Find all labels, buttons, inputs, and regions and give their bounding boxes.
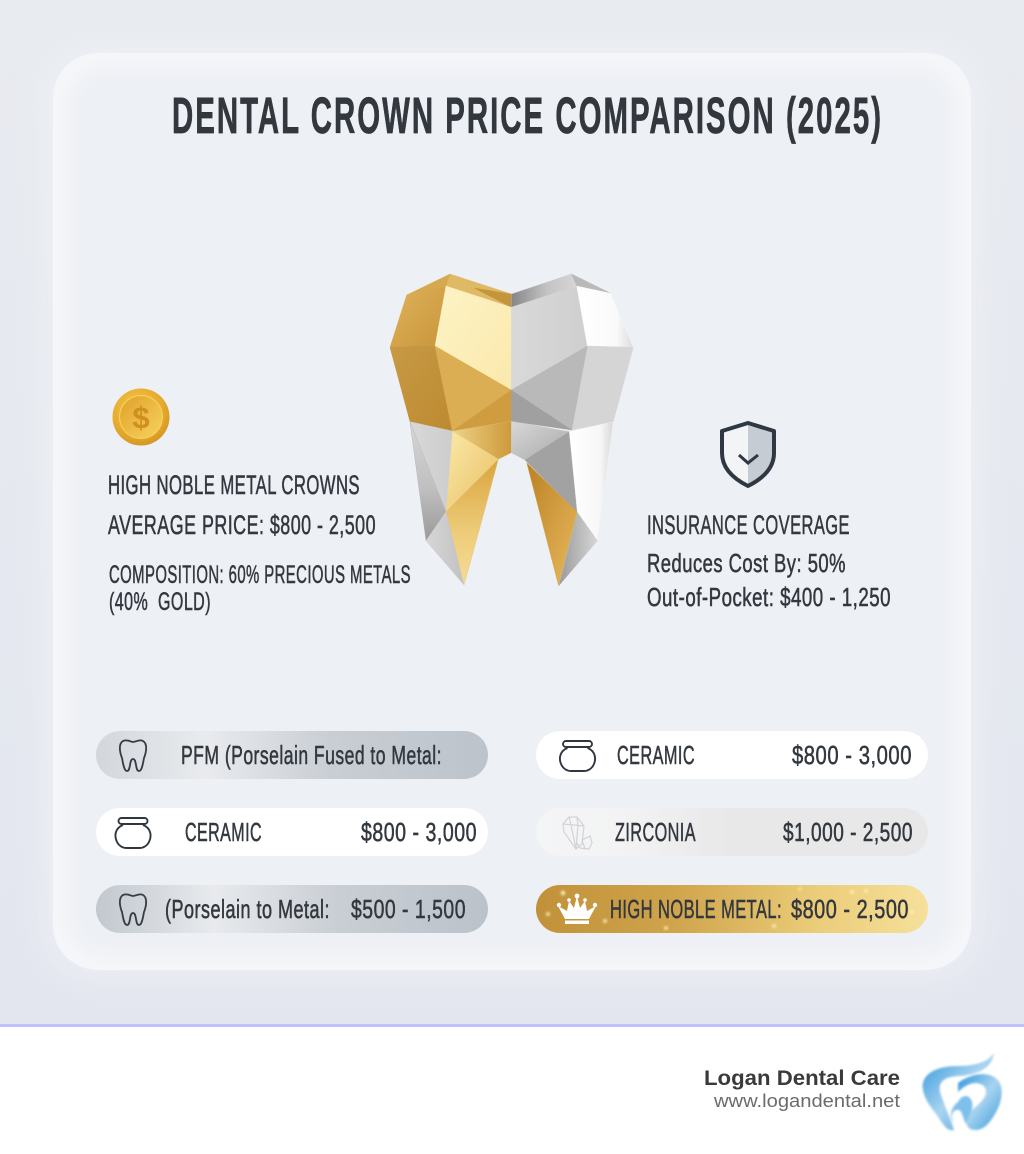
- text block: insurance coverage: Out-of-Pocket: $400 - 1,250: [647, 582, 891, 612]
- text block: high noble metal crowns: AVERAGE PRICE: $800 - 2,500: [108, 510, 376, 540]
- icon: tooth outline: [120, 740, 146, 771]
- pill: ceramic, left: CERAMIC: [185, 817, 262, 847]
- text block: high noble metal crowns: (40% GOLD): [109, 588, 211, 616]
- pill: ceramic, left: $800 - 3,000: [361, 817, 477, 847]
- pill: porcelain to metal: [96, 885, 488, 933]
- pill: zirconia: $1,000 - 2,500: [783, 817, 913, 847]
- pill: ceramic, right: [536, 731, 928, 779]
- pill: high noble metal: HIGH NOBLE METAL:: [610, 894, 782, 924]
- panel: main card: [42, 42, 982, 982]
- pill: PFM: [96, 731, 488, 779]
- pill: porcelain to metal: (Porselain to Metal:: [165, 894, 330, 924]
- footer: [0, 1024, 1024, 1154]
- icon: ceramic pot: [115, 818, 151, 848]
- icon: insurance shield: [722, 423, 774, 486]
- text block: insurance coverage: Reduces Cost By: 50%: [647, 548, 846, 578]
- icon: crystal: [563, 817, 592, 849]
- footer brand name: Logan Dental Care: [704, 1066, 900, 1090]
- icon: gold coin: $: [132, 400, 150, 435]
- pill: porcelain to metal: $500 - 1,500: [351, 894, 466, 924]
- illustration: low-poly gold and silver tooth: [390, 274, 633, 586]
- logo: blue tooth mark: [923, 1053, 1002, 1130]
- pill: zirconia: [536, 808, 928, 856]
- pill: PFM: PFM (Porselain Fused to Metal:: [181, 740, 442, 770]
- sparkles: [546, 888, 914, 930]
- pill: ceramic, left: [96, 808, 488, 856]
- pill: high noble metal: $800 - 2,500: [791, 894, 909, 924]
- text block: high noble metal crowns: COMPOSITION: 60% PRECIOUS METALS: [109, 561, 411, 589]
- pill: high noble metal: [536, 885, 928, 933]
- text block: high noble metal crowns: HIGH NOBLE METAL CROWNS: [108, 470, 360, 500]
- footer website: www.logandental.net: [713, 1091, 900, 1111]
- icon: tooth outline: [120, 894, 146, 925]
- text block: insurance coverage: [647, 510, 891, 612]
- text block: insurance coverage: INSURANCE COVERAGE: [647, 510, 850, 540]
- icon: gold coin: [112, 388, 170, 446]
- pill: zirconia: ZIRCONIA: [615, 817, 696, 847]
- pill: ceramic, right: $800 - 3,000: [792, 740, 912, 770]
- icon: ceramic pot: [560, 741, 595, 771]
- pill: ceramic, right: CERAMIC: [617, 740, 695, 770]
- text block: high noble metal crowns: [108, 470, 411, 616]
- icon: crown: [557, 894, 597, 924]
